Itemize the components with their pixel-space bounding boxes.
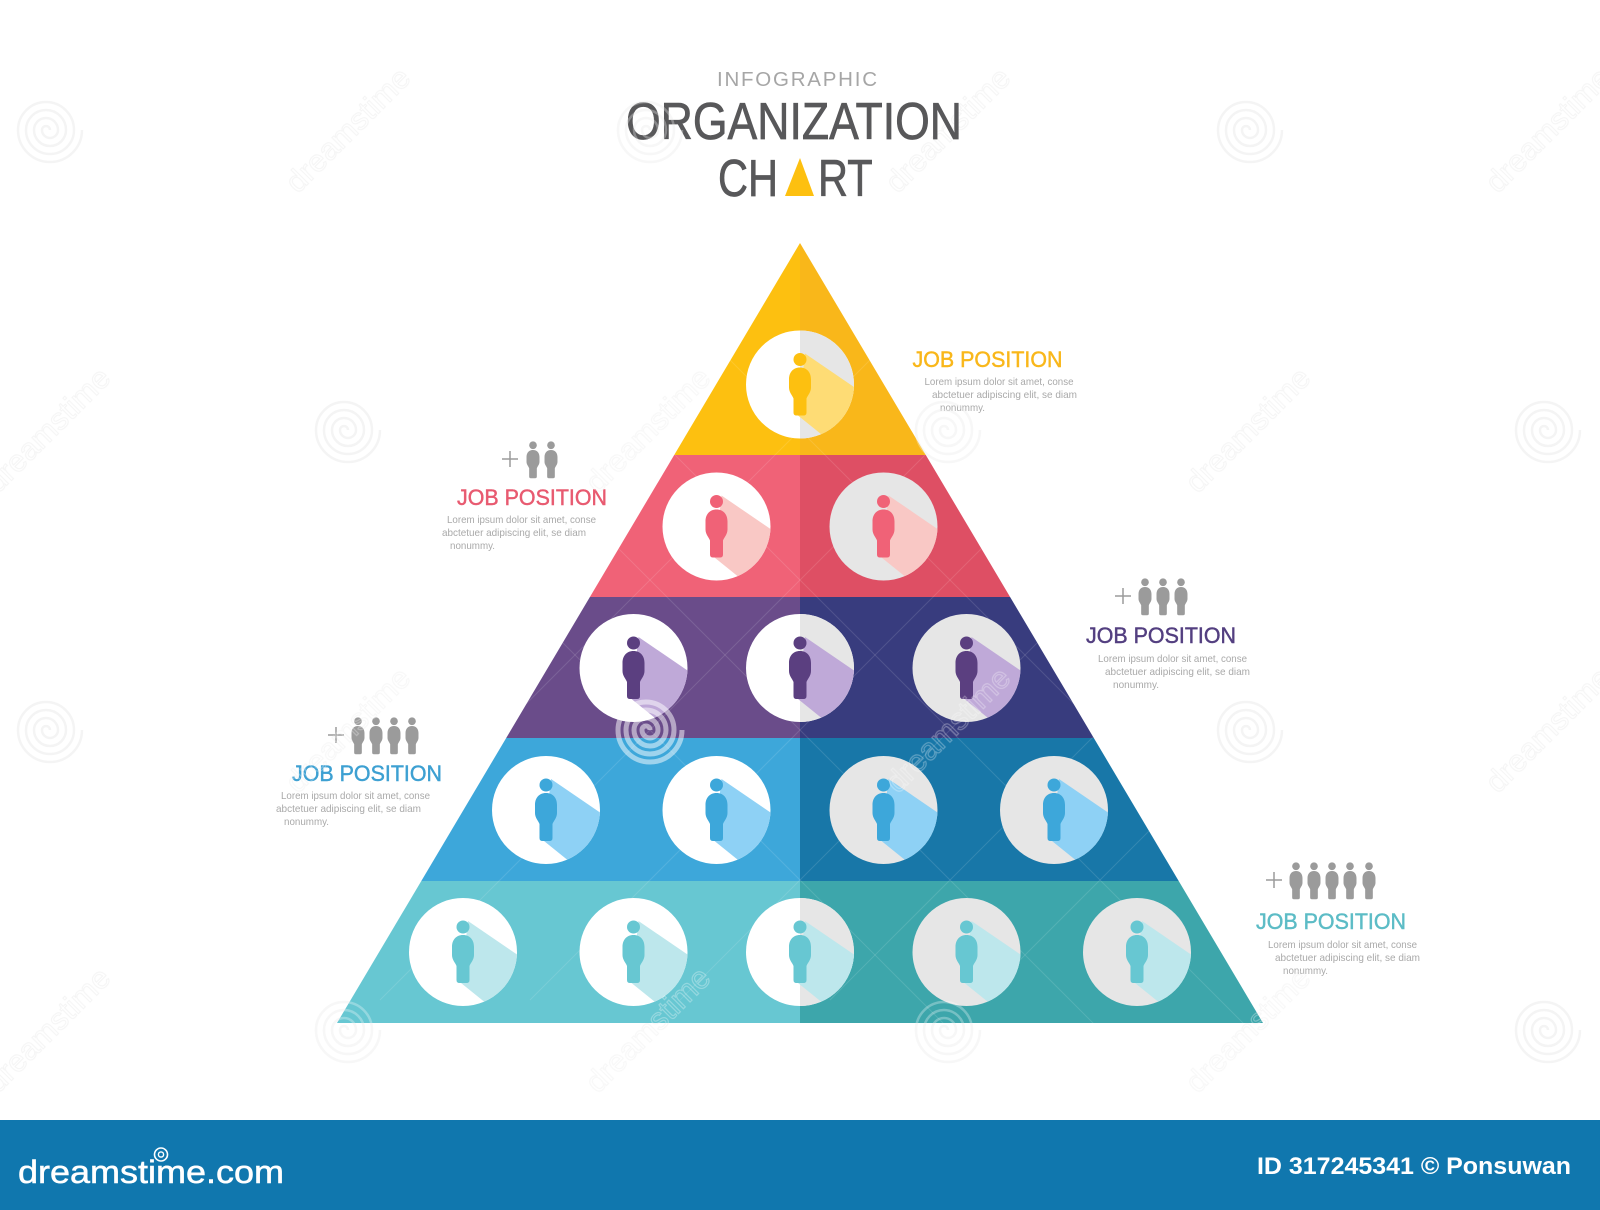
text block: teal description bbox=[1268, 939, 1420, 977]
text block: blue description: abctetuer adipiscing elit, se diam bbox=[276, 803, 421, 815]
watermark overlay bbox=[278, 102, 1317, 1099]
tier 3 band: purple bbox=[506, 597, 1094, 738]
title line: CHART: RT bbox=[818, 149, 873, 207]
heading: job position blue: JOB POSITION bbox=[292, 761, 442, 786]
text: dreamstime bbox=[278, 60, 417, 199]
callout: tier 5 teal bbox=[1256, 862, 1420, 977]
person node: tier 5 fifth bbox=[1083, 898, 1191, 1006]
person node: tier 5 second bbox=[580, 898, 688, 1006]
person node: tier 4 third bbox=[830, 756, 938, 864]
tier 2 band: pink bbox=[590, 455, 1010, 597]
heading: job position yellow: JOB POSITION bbox=[912, 347, 1062, 372]
text: dreamstime bbox=[1178, 360, 1317, 499]
watermark spiral on pyramid bbox=[618, 702, 682, 762]
text block: pink description: nonummy. bbox=[450, 540, 495, 552]
pyramid chart bbox=[337, 243, 1263, 1023]
person node: tier 4 first bbox=[492, 756, 600, 864]
text: dreamstime bbox=[1178, 960, 1317, 1099]
text block: yellow description: Lorem ipsum dolor sit amet, conse bbox=[924, 376, 1074, 388]
text block: blue description: nonummy. bbox=[284, 816, 329, 828]
callout: tier 3 purple bbox=[1086, 578, 1250, 691]
text block: purple description: nonummy. bbox=[1113, 679, 1159, 691]
text: dreamstime bbox=[578, 360, 717, 499]
icon: plus two people bbox=[502, 441, 557, 478]
icon: yellow triangle letter A bbox=[785, 158, 814, 196]
text block: blue description bbox=[276, 790, 430, 828]
person node: tier 5 fourth bbox=[912, 898, 1020, 1006]
person node: tier 4 fourth bbox=[1000, 756, 1108, 864]
watermark overlay: dreamstime bbox=[1178, 960, 1317, 1099]
person node: tier 3 centre bbox=[746, 614, 854, 722]
heading: job position pink: JOB POSITION bbox=[457, 485, 607, 510]
footer logo: dreamstime.com bbox=[18, 1154, 284, 1190]
text block: purple description: Lorem ipsum dolor sit amet, conse bbox=[1098, 653, 1247, 665]
title eyebrow: INFOGRAPHIC: INFOGRAPHIC bbox=[717, 68, 877, 91]
text block: yellow description: abctetuer adipiscing elit, se diam bbox=[932, 389, 1077, 401]
text block: blue description: Lorem ipsum dolor sit amet, conse bbox=[281, 790, 430, 802]
person node: tier 1 centre bbox=[746, 330, 854, 438]
tier 5 band: teal bbox=[337, 881, 1263, 1023]
person node: tier 3 right bbox=[912, 614, 1020, 722]
callout: tier 4 blue bbox=[276, 717, 442, 828]
heading: job position teal: JOB POSITION bbox=[1256, 909, 1406, 934]
text block: purple description bbox=[1098, 653, 1250, 691]
text block: pink description bbox=[442, 514, 596, 552]
callout: tier 2 pink bbox=[442, 441, 607, 552]
text: dreamstime bbox=[878, 60, 1017, 199]
heading: job position purple: JOB POSITION bbox=[1086, 623, 1236, 648]
text block: pink description: abctetuer adipiscing elit, se diam bbox=[442, 527, 586, 539]
title line: CHART: CH bbox=[718, 149, 778, 207]
text block: teal description: nonummy. bbox=[1283, 965, 1328, 977]
person node: tier 3 left bbox=[580, 614, 688, 722]
watermark overlay: dreamstime bbox=[578, 960, 717, 1099]
tier 1 band: yellow bbox=[674, 243, 926, 455]
person node: tier 5 centre bbox=[746, 898, 854, 1006]
icon: plus four people bbox=[328, 717, 418, 754]
text block: teal description: Lorem ipsum dolor sit amet, conse bbox=[1268, 939, 1417, 951]
text block: yellow description bbox=[924, 376, 1077, 414]
text: dreamstime bbox=[278, 660, 417, 799]
callout: tier 1 yellow bbox=[912, 347, 1077, 414]
text block: yellow description: nonummy. bbox=[940, 402, 985, 414]
icon: plus five people bbox=[1266, 862, 1375, 899]
title line: ORGANIZATION: ORGANIZATION bbox=[626, 93, 962, 151]
watermark overlay: dreamstime bbox=[278, 660, 417, 799]
icon: logo spiral bbox=[154, 1148, 168, 1161]
footer bar bbox=[0, 1120, 1600, 1210]
person node: tier 2 left bbox=[662, 472, 770, 580]
person node: tier 4 second bbox=[662, 756, 770, 864]
watermark overlay: dreamstime bbox=[578, 360, 717, 499]
text: dreamstime bbox=[578, 960, 717, 1099]
footer credit: ID 317245341 © Ponsuwan bbox=[1257, 1153, 1571, 1180]
text block: teal description: abctetuer adipiscing elit, se diam bbox=[1275, 952, 1420, 964]
tier 4 band: blue bbox=[421, 738, 1179, 881]
person node: tier 5 first bbox=[409, 898, 517, 1006]
text block: pink description: Lorem ipsum dolor sit amet, conse bbox=[447, 514, 596, 526]
text: dreamstime bbox=[878, 660, 1017, 799]
text block: purple description: abctetuer adipiscing elit, se diam bbox=[1105, 666, 1250, 678]
title bbox=[626, 68, 962, 207]
icon: plus three people bbox=[1115, 578, 1187, 615]
person node: tier 2 right bbox=[830, 472, 938, 580]
watermark overlay: dreamstime bbox=[878, 660, 1017, 799]
